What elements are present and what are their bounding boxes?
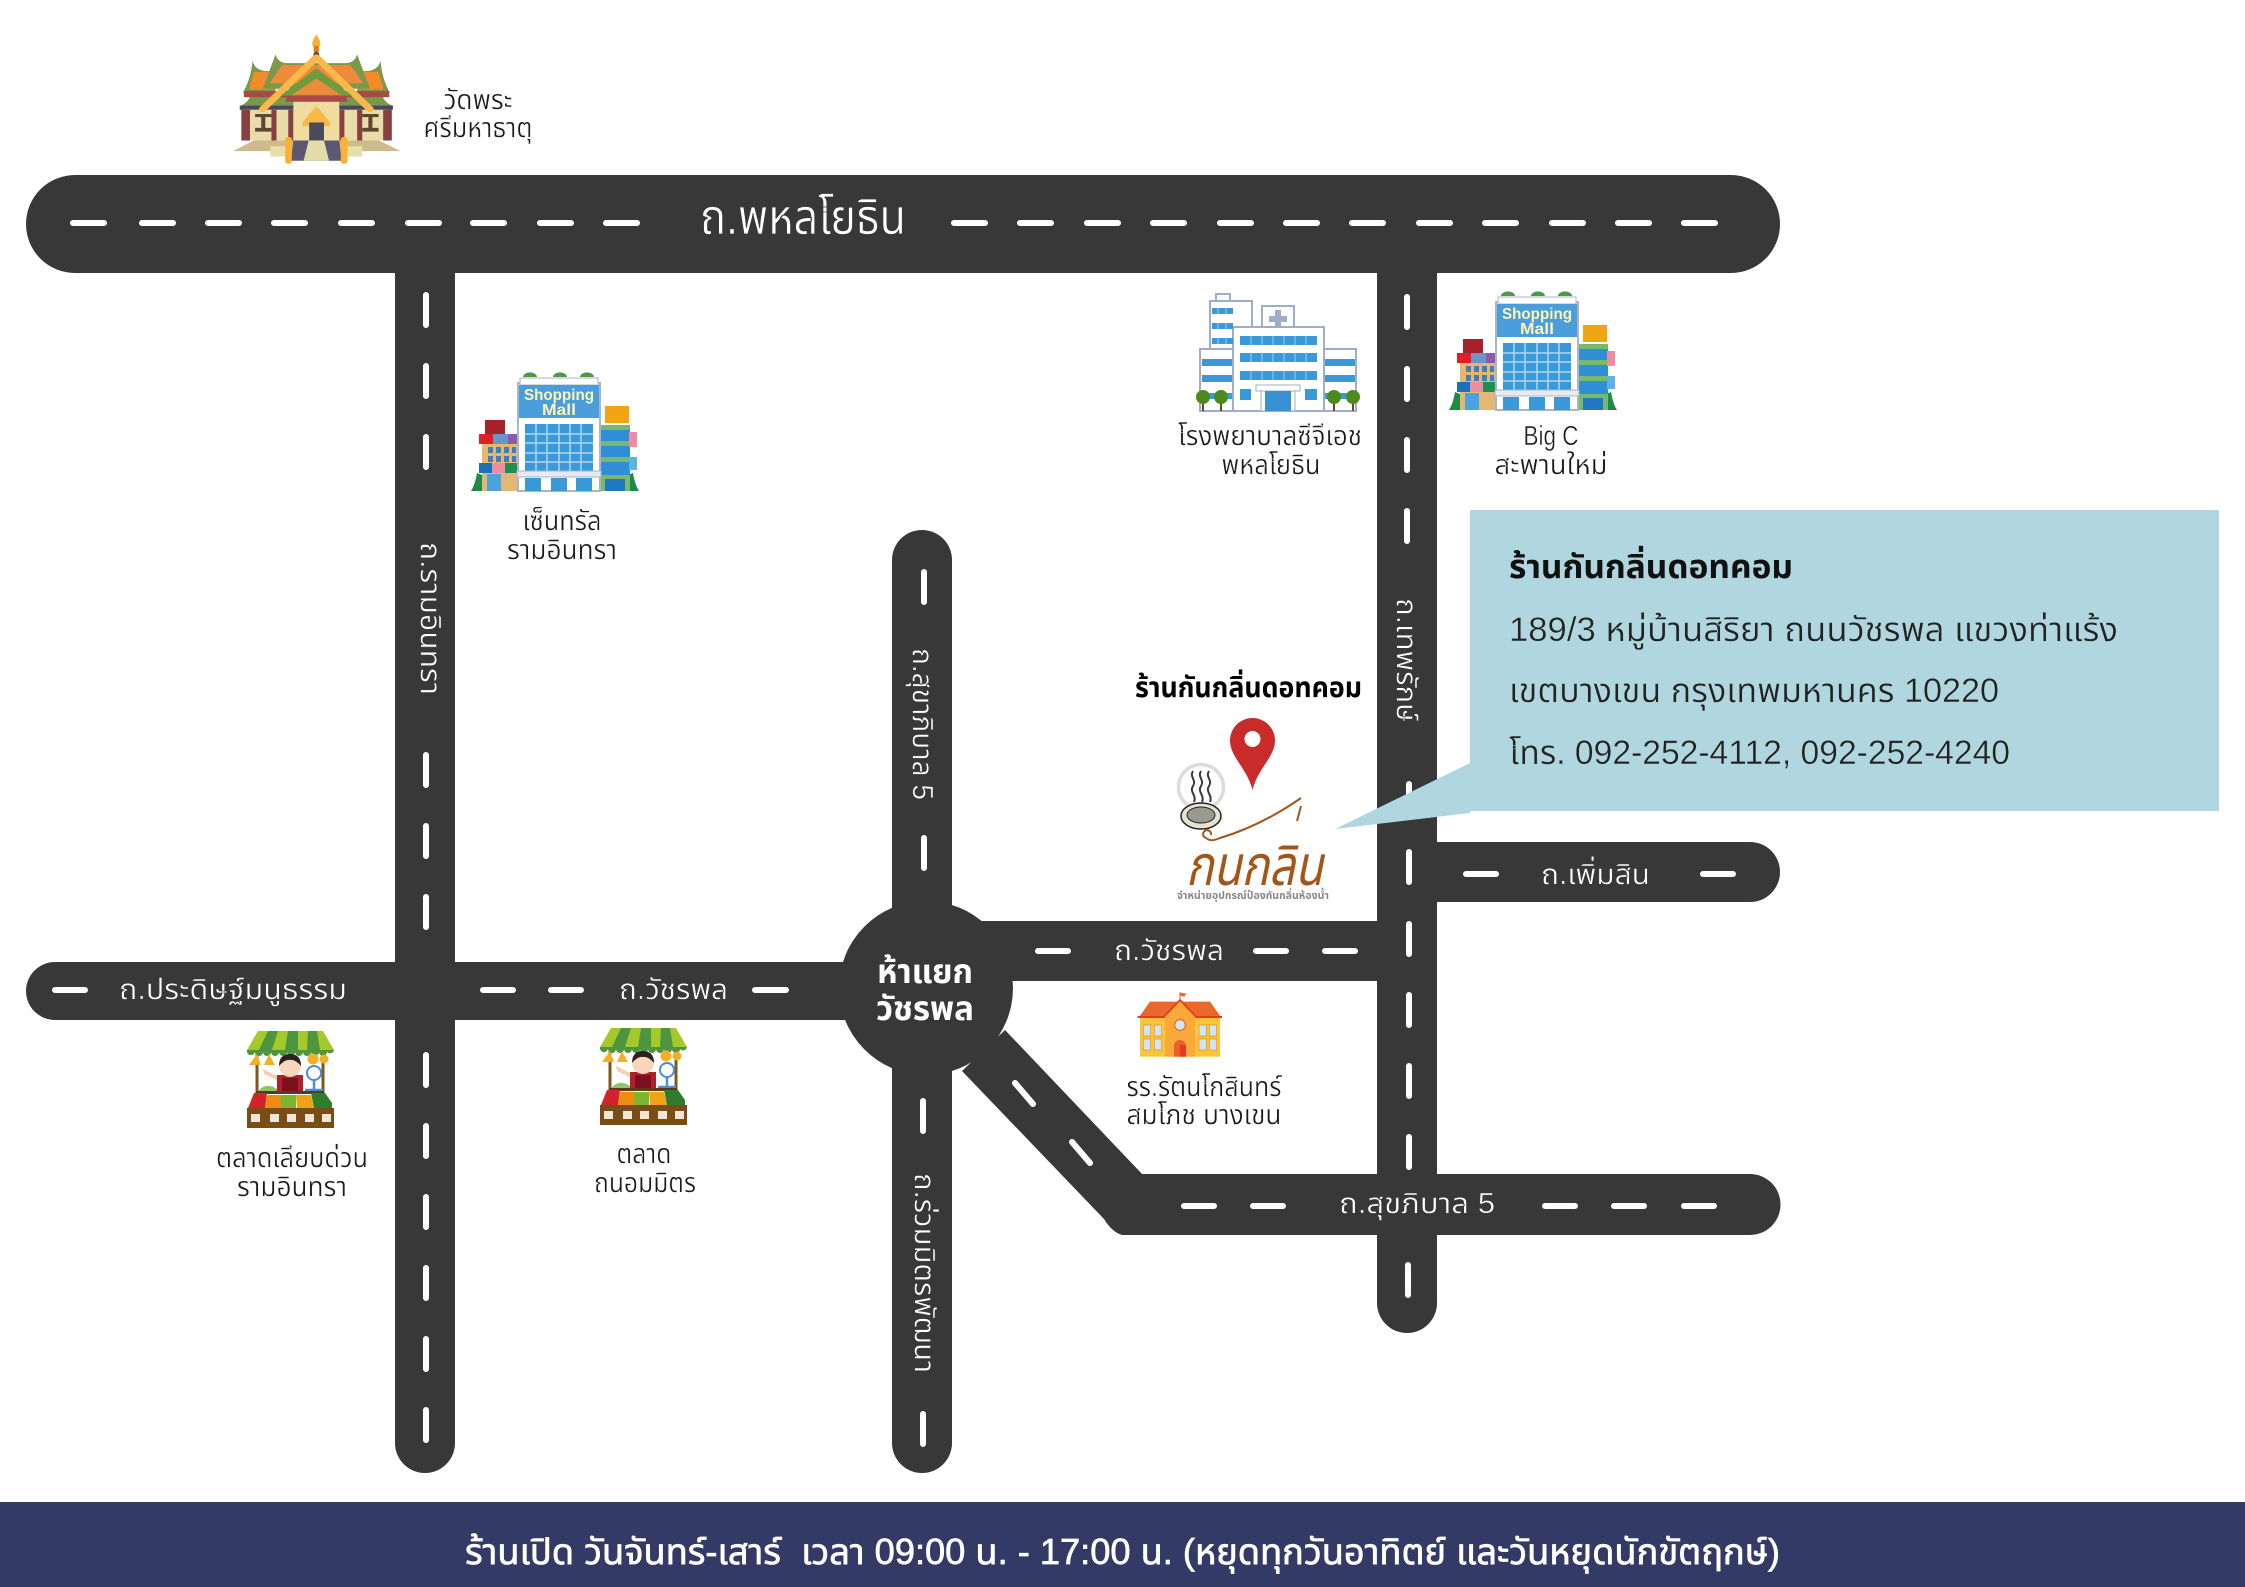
logo: Kan Klin — [1177, 798, 1329, 902]
icon: shopping mall (Big C): Shopping — [1502, 306, 1572, 323]
road: Ram Inthra (left vertical): ถ.รามอินทรา — [414, 542, 446, 695]
road: Sukhaphiban 5 (centre vertical, upper): ถ.สุขาภิบาล 5 — [906, 648, 938, 800]
label: Liap Duan market — [216, 1142, 368, 1202]
icon: shopping mall (Big C) — [1449, 291, 1617, 410]
label: Central Ram Inthra: รามอินทรา — [507, 534, 617, 565]
callout: shop address: 189/3 หมู่บ้านสิริยา ถนนวัชรพล แขวงท่าแร้ง — [1509, 611, 2118, 650]
road: Watcharapol east — [950, 921, 1390, 981]
label: Big C Saphan Mai: Big C — [1524, 420, 1578, 451]
road: Phahonyothin (top) — [26, 175, 1780, 273]
label: Thanon Om Mit market: ตลาด — [616, 1138, 672, 1169]
icon: shopping mall (Central Ram Inthra) — [471, 372, 639, 491]
icon: temple — [233, 34, 401, 164]
icon: location pin — [1230, 718, 1275, 790]
label: CGH Phahonyothin hospital: พหลโยธิน — [1222, 449, 1320, 480]
label: Thanon Om Mit market — [594, 1138, 696, 1198]
road: Pradit Manutham / Watcharapol west: ถ.ประดิษฐ์มนูธรรม — [119, 974, 347, 1007]
five-way junction circle — [839, 901, 1013, 1075]
label: Wat Phra Sri Mahathat: วัดพระ — [444, 84, 512, 115]
icon: shopping mall (Central Ram Inthra): Mall — [542, 402, 576, 419]
road: Watcharapol east: ถ.วัชรพล — [1114, 935, 1224, 967]
footer: opening hours: ร้านเปิด วันจันทร์-เสาร์ เวลา 09:00 น. - 17:00 น. (หยุดทุกวันอาทิตย์ และวันหยุดนักขัตฤกษ์) — [465, 1531, 1780, 1573]
shop name above pin: ร้านกันกลิ่นดอทคอม — [1135, 669, 1362, 703]
callout: shop address: เขตบางเขน กรุงเทพมหานคร 10220 — [1509, 672, 1999, 711]
logo: Kan Klin: กนกลิน — [1186, 834, 1326, 897]
road: Sukhaphiban 5 (horizontal): ถ.สุขภิบาล 5 — [1339, 1188, 1495, 1220]
footer: opening hours — [0, 1502, 2245, 1587]
five-way junction circle: วัชรพล — [876, 990, 974, 1028]
road: Ram Inthra (left vertical) — [395, 240, 455, 1473]
label: Thanon Om Mit market: ถนอมมิตร — [594, 1167, 696, 1198]
label: Central Ram Inthra — [507, 505, 617, 565]
road: Sukhaphiban 5 (centre vertical, upper) — [892, 530, 952, 970]
logo: Kan Klin: จำหน่ายอุปกรณ์ป้องกันกลิ่นห้องน้ำ — [1177, 887, 1329, 902]
road: Pradit Manutham / Watcharapol west — [26, 962, 886, 1020]
label: Wat Phra Sri Mahathat: ศรีมหาธาตุ — [424, 112, 532, 144]
label: Rattanakosin Somphot Bang Khen school: รร.รัตนโกสินทร์ — [1126, 1071, 1283, 1102]
label: Liap Duan market: รามอินทรา — [237, 1171, 347, 1202]
label: Big C Saphan Mai: สะพานใหม่ — [1494, 449, 1608, 480]
icon: market stall (Thanon Om Mit) — [600, 1028, 687, 1125]
road: Ruam Mit Phatthana (centre vertical, lower) — [892, 1000, 952, 1473]
label: Rattanakosin Somphot Bang Khen school — [1126, 1071, 1283, 1130]
label: Rattanakosin Somphot Bang Khen school: สมโภช บางเขน — [1126, 1099, 1282, 1130]
road: Thep Rak (right vertical): ถ.เทพรักษ์ — [1390, 598, 1422, 722]
label: Big C Saphan Mai — [1494, 420, 1608, 480]
icon: hospital — [1196, 294, 1360, 411]
icon: school — [1138, 992, 1222, 1057]
callout: shop address: ร้านกันกลิ่นดอทคอม — [1509, 545, 1793, 585]
label: Liap Duan market: ตลาดเลียบด่วน — [216, 1142, 368, 1173]
icon: shopping mall (Big C): Mall — [1520, 321, 1554, 338]
label: CGH Phahonyothin hospital: โรงพยาบาลซีจีเอช — [1178, 420, 1362, 451]
icon: shopping mall (Central Ram Inthra): Shopping — [524, 387, 594, 404]
label: CGH Phahonyothin hospital — [1178, 420, 1362, 480]
road: Sukhaphiban 5 (horizontal) — [1122, 1174, 1780, 1235]
icon: drain with odour — [1178, 764, 1224, 829]
road: Ruam Mit Phatthana (centre vertical, lower): ถ.ร่วมมิตรพัฒนา — [908, 1173, 940, 1373]
road: Thep Rak (right vertical) — [1377, 240, 1437, 1333]
label: Wat Phra Sri Mahathat — [424, 84, 532, 144]
road: diagonal to Sukhaphiban 5 — [962, 1030, 1160, 1235]
road: Pradit Manutham / Watcharapol west: ถ.วัชรพล — [619, 974, 728, 1006]
label: Central Ram Inthra: เซ็นทรัล — [522, 505, 602, 536]
road: Permsin — [1430, 842, 1780, 902]
callout: shop address: โทร. 092-252-4112, 092-252-4240 — [1509, 734, 2010, 772]
five-way junction circle: ห้าแยก — [877, 953, 973, 991]
road: Permsin: ถ.เพิ่มสิน — [1541, 856, 1650, 891]
icon: market stall (Liap Duan) — [247, 1031, 334, 1128]
callout: shop address — [1335, 510, 2219, 829]
road: Phahonyothin (top): ถ.พหลโยธิน — [700, 191, 906, 245]
